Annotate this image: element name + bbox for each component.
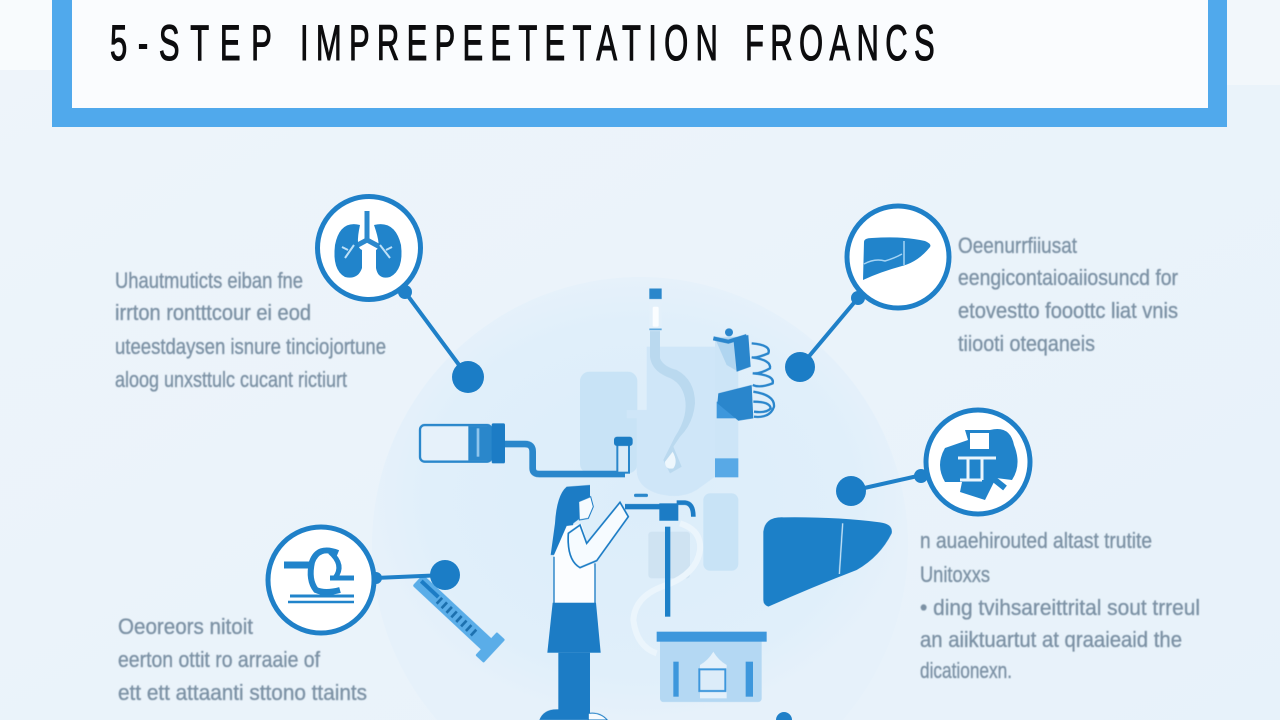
person xyxy=(539,485,628,720)
icon: scanner xyxy=(268,527,374,633)
syringe xyxy=(407,568,505,663)
connector line xyxy=(375,575,445,578)
text: lungs note: aloog unxsttulc cucant rictiurt xyxy=(115,367,348,392)
tap and tube xyxy=(625,494,693,617)
title banner xyxy=(52,0,1227,127)
text: organ note: Unitoxxs xyxy=(920,562,990,587)
text: lungs note: irrton rontttcour ei eod xyxy=(115,300,311,325)
callout: liver xyxy=(785,206,1178,382)
text: scanner note: Oeoreors nitoit xyxy=(118,614,254,639)
text: organ note: an aiiktuartut at qraaieaid the xyxy=(920,627,1182,652)
text: organ note: dicationexn. xyxy=(920,658,1012,683)
central illustration xyxy=(407,288,892,720)
connector dot xyxy=(836,476,866,506)
pale organ shapes xyxy=(580,330,738,653)
text: liver note: etovestto fooottc liat vnis xyxy=(958,298,1178,323)
text: liver note: Oeenurrfiiusat xyxy=(958,233,1078,258)
torso xyxy=(553,524,595,603)
text: scanner note: ett ett attaanti sttono ttaints xyxy=(118,680,367,705)
title: IMPREPEETETATION xyxy=(300,14,718,71)
text: liver note: eengicontaioaiiosuncd for xyxy=(958,265,1178,290)
tray xyxy=(657,632,767,702)
text: organ note: • ding tvihsareittrital sout trreul xyxy=(920,595,1200,620)
bottom edge marker xyxy=(776,712,792,720)
top tube xyxy=(649,288,662,331)
connector dot xyxy=(452,361,484,393)
callout: organ badge xyxy=(836,410,1200,683)
right column with coils xyxy=(713,328,774,477)
title: 5-STEP xyxy=(110,14,272,71)
icon: organ badge xyxy=(926,410,1030,514)
text: scanner note: eerton ottit ro arraaie of xyxy=(118,647,321,672)
skirt xyxy=(547,603,601,653)
text: lungs note: uteestdaysen isnure tinciojortune xyxy=(115,334,386,359)
connector line xyxy=(405,292,468,377)
text: liver note: tiiooti oteqaneis xyxy=(958,331,1095,356)
text: scanner note xyxy=(118,614,367,705)
callout: scanner xyxy=(118,527,460,705)
connector dot xyxy=(430,560,460,590)
connector line xyxy=(851,475,922,491)
hair xyxy=(551,485,590,555)
text: lungs note xyxy=(115,268,386,392)
connector line xyxy=(800,298,858,367)
icon: lungs xyxy=(318,196,420,300)
bottle and pipe xyxy=(420,423,633,474)
shoes xyxy=(539,709,590,720)
arm xyxy=(568,502,628,568)
large liver xyxy=(763,517,892,607)
title xyxy=(110,14,935,71)
text: liver note xyxy=(958,233,1178,356)
legs xyxy=(558,653,590,711)
title: FROANCS xyxy=(745,14,935,71)
text: lungs note: Uhautmuticts eiban fne xyxy=(115,268,303,293)
face xyxy=(579,497,593,520)
text: organ note xyxy=(920,528,1200,683)
icon: liver xyxy=(847,206,949,308)
callout: lungs xyxy=(115,196,484,393)
central halo circle xyxy=(372,277,908,720)
text: organ note: n auaehirouted altast trutite xyxy=(920,528,1152,553)
connector dot xyxy=(785,352,815,382)
